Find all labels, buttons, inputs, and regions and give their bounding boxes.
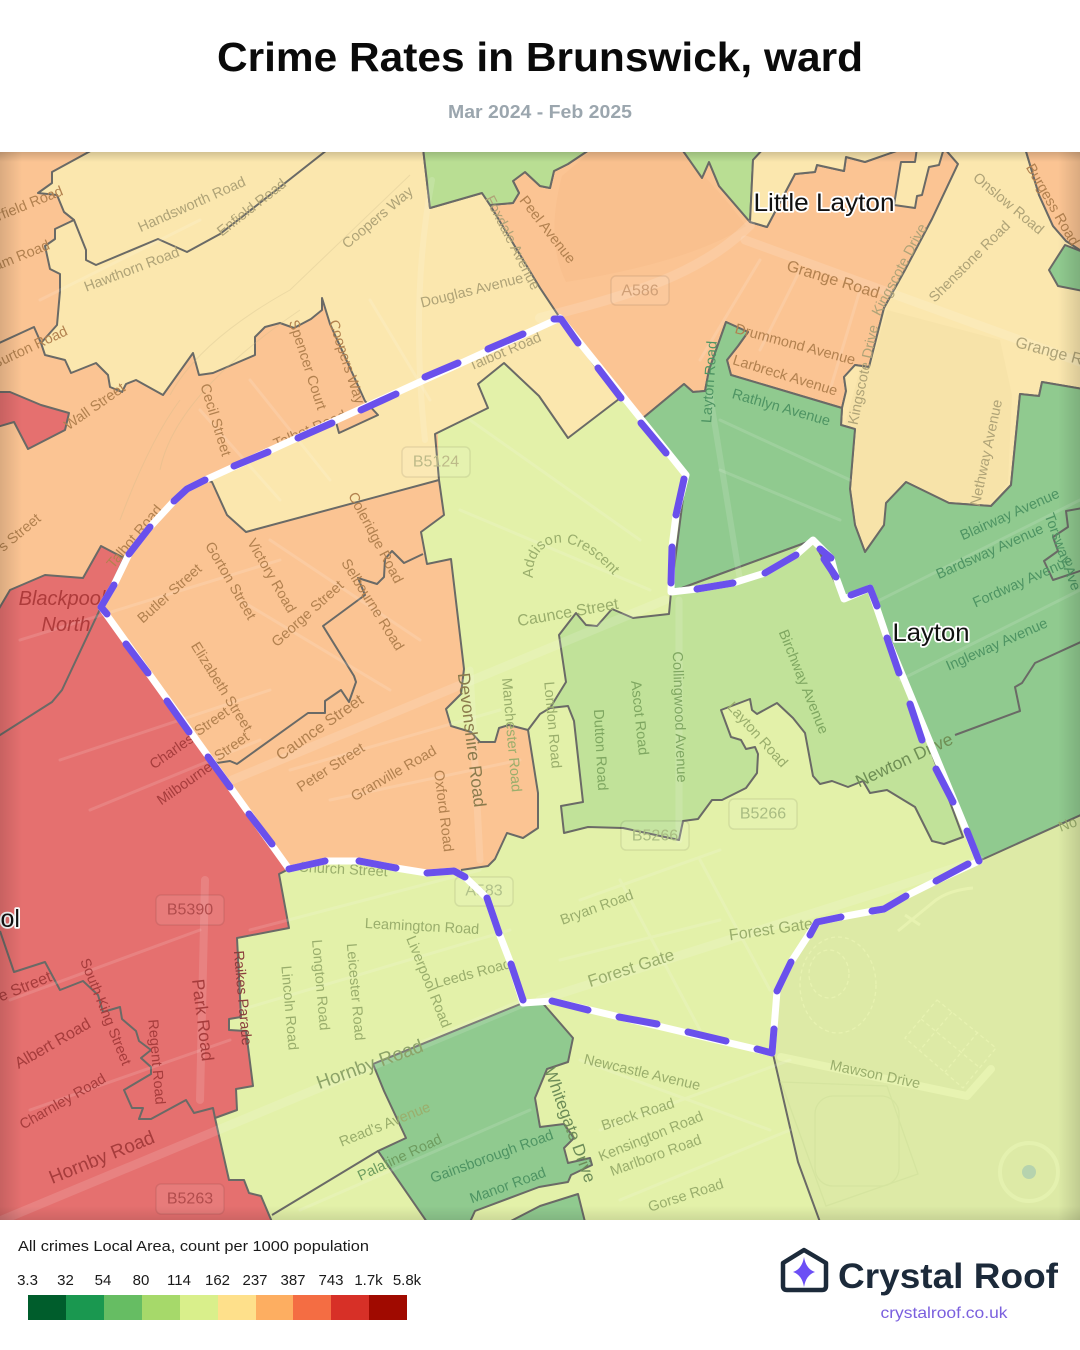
street labels: Charnley Road [17,1071,109,1133]
icon: house with star [783,1250,826,1290]
street labels: Park Road [188,978,218,1062]
street labels: Devonshire Road [454,672,490,808]
street labels: Hawthorn Road [82,244,182,296]
street labels: Church Street [298,860,388,880]
area: darker retail block [688,160,704,179]
map edge shading [0,152,1080,1220]
street labels: Spencer Court [285,318,329,412]
street labels: Caunce Street [273,691,367,764]
street labels: Liverpool Road [402,934,454,1030]
street labels: Bryan Road [558,887,636,929]
road number badges [156,276,797,1214]
badge B5263 [156,1184,224,1214]
street labels: Regent Road [144,1019,168,1105]
street labels: Gorse Road [646,1176,726,1216]
street labels: No [1057,814,1079,836]
boundary: orange east edge [421,480,538,870]
street labels: Manor Road [468,1165,548,1207]
legend values: 162 [205,1272,230,1289]
legend values: 80 [133,1272,149,1289]
street labels: Granville Road [348,743,440,805]
street labels: Fordway Avenue [971,553,1075,611]
street labels: Addison Crescent [522,534,619,578]
legend values: 54 [95,1272,111,1289]
street labels: Lincoln Road [277,965,301,1051]
street labels: Coleridge Road [344,490,406,586]
place label: Layton: Layton [892,619,970,647]
railway lines [120,175,410,520]
legend title: All crimes Local Area, count per 1000 population [18,1238,369,1255]
park paths and pitches [781,888,996,1206]
street labels [0,163,1080,1210]
street labels: Grange Road [785,258,881,302]
badge B5124 [402,447,470,477]
badge B5266 east: B5266 [740,806,786,822]
street labels: Street [212,729,252,765]
street labels: Newcastle Avenue [582,1052,702,1094]
area: playing field [851,426,955,548]
badge A583: A583 [465,882,503,900]
street labels: Leamington Road [364,916,480,938]
badge A583 [455,877,513,906]
street labels: Foxdale Avenue [481,193,543,293]
area: top green neighbourhood [423,148,592,208]
legend values: 114 [167,1272,191,1289]
area: base low-crime neighbourhoods [216,364,1080,1220]
legend values: 743 [318,1272,344,1289]
street labels: Whitegate Drive [540,1065,600,1185]
street labels: Forest Gate [728,916,814,944]
street labels: Ingleway Avenue [944,615,1050,675]
street labels: Manchester Road [498,677,524,793]
badge B5266 west [621,821,689,850]
street labels: Rathlyn Avenue [730,386,832,430]
place label: Blackpool North station: North [42,614,90,636]
street labels: Breck Road [599,1096,677,1134]
street labels: Onslow Road [970,170,1046,238]
street labels: Handsworth Road [136,174,248,236]
street labels: George Street [269,578,347,650]
street labels: Charles [147,731,197,773]
street labels: London Road [540,681,564,769]
area: south green neighbourhood [373,1000,592,1222]
street labels: Peter Street [294,740,368,796]
street labels: Coopers Way [339,183,417,252]
legend values: 32 [57,1272,74,1289]
street labels: Birchway Avenue [775,628,831,736]
street labels: Kingscote Drive [869,221,931,319]
area: top green neighbourhood east [682,152,759,223]
street labels: Kingscote Drive [846,324,882,426]
street labels: South King Street [76,956,134,1068]
street labels: Leeds Road [433,956,513,992]
legend colour scale [28,1295,407,1320]
street labels: Douglas Avenue [419,270,525,312]
badge B5263: B5263 [167,1190,213,1208]
street labels: Drummond Avenue [733,321,857,369]
park pond ring [1000,1143,1058,1201]
street labels: Read's Avenue [337,1099,433,1151]
street labels: Layton Road [724,699,790,771]
street labels: Bardsway Avenue [934,521,1046,583]
street labels: Milbourne [154,759,216,809]
street labels: Butler Street [135,561,205,627]
ward boundary: purple dashes [101,319,979,1053]
street labels: Larbreck Avenue [731,352,839,400]
street labels: Gorton Street [201,539,259,623]
place label: Little Layton: Little Layton [754,189,894,217]
area: north-east green nub [1049,245,1080,291]
street labels: Forest Gate [585,945,677,991]
street labels: Albert Road [12,1016,94,1072]
street labels: Victory Road [243,536,299,616]
street labels: Kensington Road [596,1109,706,1165]
street labels: Hornby Road [46,1127,158,1189]
street labels: Raikes Parade [230,950,254,1046]
area: north-east orange neighbourhoods [482,148,958,418]
street labels: Palatine Road [355,1132,445,1184]
badge A586: A586 [621,282,659,300]
street labels: Hornby Road [314,1036,426,1094]
title: Crime Rates in Brunswick, ward [217,34,863,80]
street labels: Dutton Road [590,709,610,791]
legend values [17,1272,422,1289]
street labels: Collingwood Avenue [669,651,689,783]
legend values: 1.7k [354,1272,383,1289]
street labels: Blairway Avenue [958,486,1062,544]
street labels: Longton Road [308,939,332,1031]
area: central cream neighbourhood [38,148,619,532]
area: mid green neighbourhood inside the ward [550,540,963,844]
street labels: Talbot Road [104,502,166,572]
street labels: Ascot Road [627,680,651,756]
street labels: Newton Drive [852,729,956,791]
legend values: 387 [280,1272,306,1289]
badge B5390 [156,895,224,925]
street labels: Gainsborough Road [428,1127,556,1187]
street labels: Cecil Street [196,382,234,458]
street labels: Leicester Road [343,943,367,1041]
area: eastern cream neighbourhood [841,148,1080,552]
brand url: crystalroof.co.uk [880,1305,1009,1322]
street labels: Layton Road [699,340,721,424]
area: red high-crime neighbourhood [0,546,289,1222]
street labels: Shenstone Road [926,218,1014,306]
street labels: Marlboro Road [608,1132,704,1180]
ward boundary: white base line [101,318,979,1053]
street labels: Nethway Avenue [968,398,1006,508]
street labels: Coopers Way [325,318,367,407]
road network [0,180,1080,1225]
street labels: Talbot Road [466,330,544,374]
area: Little Layton cream block east [894,148,944,208]
badge B5390: B5390 [167,902,213,918]
area: small red patch [0,392,69,449]
area: southern green fragment [509,1194,585,1222]
place label: Blackpool North station: Blackpool [19,588,106,610]
area: western orange neighbourhoods [0,148,538,873]
street labels: Caunce Street [516,596,620,630]
badge B5266 west: B5266 [632,828,678,844]
street labels: Peel Avenue [516,193,578,267]
street labels: Street [192,704,232,740]
area: Little Layton cream block [750,148,905,227]
choropleth map [0,152,1080,1220]
badge B5266 east [729,799,797,829]
place label: Blackpool cut off at the edge: ol [1,905,20,933]
street labels: Wall Street [62,380,128,434]
street labels: Oxford Road [430,769,456,853]
place label: Blackpool North station [19,590,106,631]
area: eastern green neighbourhood [643,322,1080,861]
street labels: Enfield Road [214,176,290,240]
internal neighbourhood boundaries [0,150,1080,1222]
street labels: Selbourne Road [337,556,407,654]
badge A586 [611,276,669,305]
subtitle: date range: Mar 2024 - Feb 2025 [448,101,632,122]
area: north-east corner orange [1025,148,1080,252]
legend values: 3.3 [17,1272,38,1289]
brand name: Crystal Roof [838,1257,1058,1296]
street labels: Mawson Drive [828,1058,922,1092]
legend [17,1238,422,1320]
legend values: 237 [242,1272,268,1289]
street labels: Elizabeth Street [187,639,255,735]
brand logo [783,1250,1058,1322]
street labels: Talbot Road [271,408,349,452]
legend values: 5.8k [393,1272,422,1289]
badge B5124: B5124 [413,454,459,470]
area: park [773,815,1080,1222]
